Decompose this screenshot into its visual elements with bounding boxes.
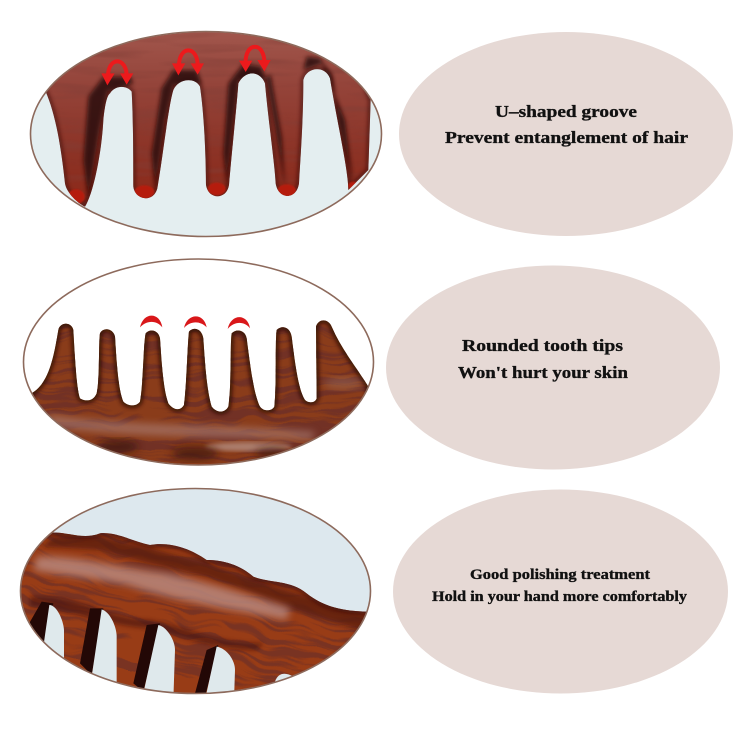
panel: polishing treatment caption	[393, 490, 728, 694]
panel: U-shaped groove caption	[399, 32, 733, 236]
caption heading: Good polishing treatment	[470, 567, 650, 583]
panel: rounded tooth tips caption	[386, 266, 720, 470]
arrowheads	[101, 60, 271, 85]
comb with wide teeth, tips down	[46, 32, 371, 207]
caption line: Prevent entanglement of hair	[445, 128, 689, 147]
caption line: Hold in your hand more comfortably	[432, 589, 688, 605]
comb spine seen at an angle	[21, 532, 366, 693]
red U arrows	[108, 47, 264, 77]
caption line: Won't hurt your skin	[458, 363, 629, 382]
caption heading: U–shaped groove	[495, 102, 638, 121]
red arcs above tooth tips	[140, 316, 250, 329]
panel: polishing treatment photo	[20, 488, 372, 694]
comb with teeth pointing up	[32, 320, 368, 464]
panel: U-shaped groove photo	[20, 20, 387, 237]
gaps between teeth	[43, 605, 293, 700]
caption heading: Rounded tooth tips	[462, 336, 623, 355]
panel: rounded tooth tips photo	[22, 258, 374, 466]
